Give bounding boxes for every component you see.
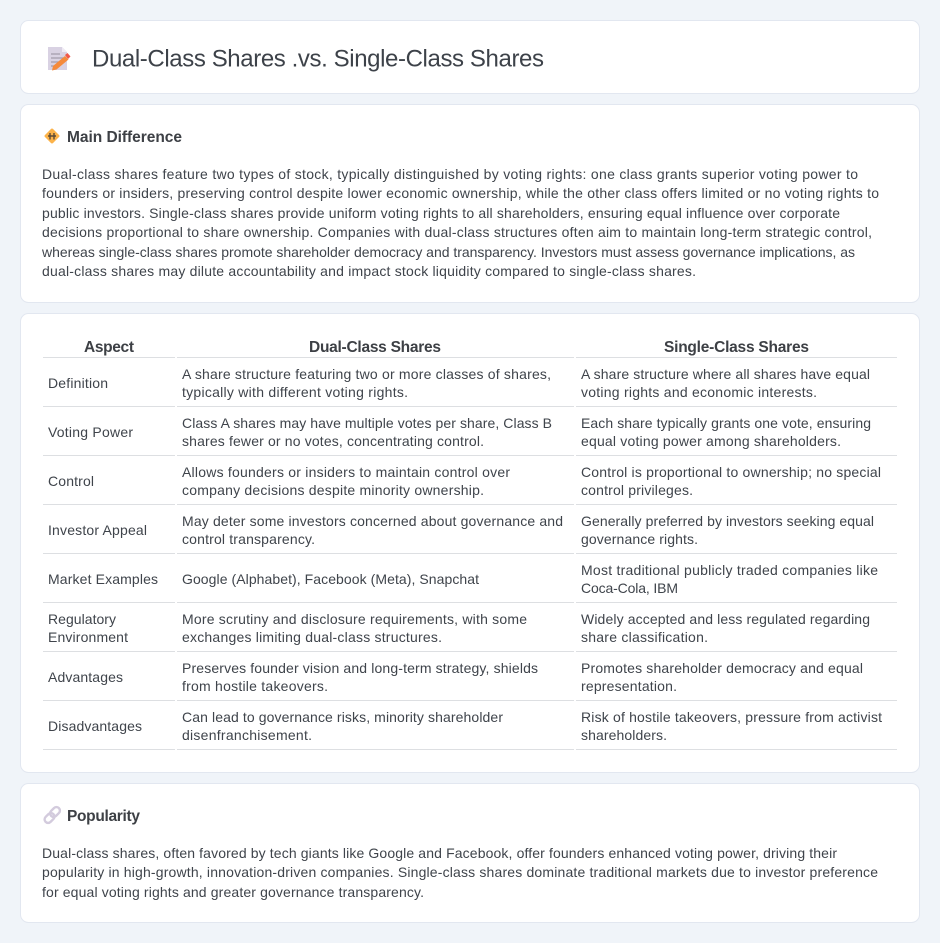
table row: voting power: Each share typically grants one vote, ensuring bbox=[581, 415, 871, 431]
text block: popularity paragraph: Dual-class shares, often favored by tech giants like Google and Facebook, offer founders enhanced voting power, driving their bbox=[42, 845, 837, 861]
table row: disadvantages: disenfranchisement. bbox=[182, 727, 312, 743]
table row: control: Control is proportional to ownership; no special bbox=[581, 464, 881, 480]
table row: voting power: Class A shares may have multiple votes per share, Class B bbox=[182, 415, 552, 431]
table header: Single-Class Shares bbox=[664, 339, 809, 356]
table row: market examples bbox=[48, 562, 878, 596]
table row: market examples: Coca-Cola, IBM bbox=[581, 580, 678, 596]
table row: disadvantages: Risk of hostile takeovers, pressure from activist bbox=[581, 709, 882, 725]
table row: advantages: from hostile takeovers. bbox=[182, 678, 328, 694]
table row: regulatory environment: Environment bbox=[48, 629, 128, 645]
table row: regulatory environment: Regulatory bbox=[48, 611, 116, 627]
table row: market examples: Google (Alphabet), Facebook (Meta), Snapchat bbox=[182, 571, 479, 587]
table row: voting power: shares fewer or no votes, concentrating control. bbox=[182, 433, 484, 449]
table row: definition bbox=[48, 366, 870, 400]
table row: control: Control bbox=[48, 473, 94, 489]
table row: investor appeal bbox=[48, 513, 874, 547]
table row: advantages bbox=[48, 660, 863, 694]
table row: investor appeal: governance rights. bbox=[581, 531, 698, 547]
table row: investor appeal: Generally preferred by investors seeking equal bbox=[581, 513, 874, 529]
table row: definition: A share structure featuring two or more classes of shares, bbox=[182, 366, 551, 382]
table row: voting power: Voting Power bbox=[48, 424, 133, 440]
table row: control bbox=[48, 464, 881, 498]
text block: main difference paragraph: whereas single-class shares promote shareholder democracy and transparency. Investors must assess governance implications, as bbox=[41, 244, 855, 260]
table row: regulatory environment: Widely accepted and less regulated regarding bbox=[581, 611, 870, 627]
table row: market examples: Market Examples bbox=[48, 571, 158, 587]
table row: investor appeal: Investor Appeal bbox=[48, 522, 147, 538]
table row: regulatory environment: share classification. bbox=[581, 629, 708, 645]
heading: main difference: Main Difference bbox=[67, 129, 182, 146]
title: Dual-Class Shares .vs. Single-Class Shares bbox=[92, 46, 544, 72]
text block: main difference paragraph: dual-class shares may dilute accountability and impact stock liquidity compared to single-class shares. bbox=[42, 263, 696, 279]
text block: popularity paragraph: popularity in high-growth, innovation-driven companies. Single-class shares dominate traditional markets due to investor preference bbox=[42, 864, 878, 880]
table header bbox=[84, 339, 809, 356]
table row: market examples: Most traditional publicly traded companies like bbox=[581, 562, 878, 578]
text block: main difference paragraph: founders or insiders, preserving control despite lower economic ownership, while the other class offers limited or no voting rights to bbox=[42, 185, 879, 201]
panel: comparison table bbox=[20, 314, 920, 772]
table row: disadvantages: Disadvantages bbox=[48, 718, 142, 734]
table row: control: company decisions despite minority ownership. bbox=[182, 482, 484, 498]
table row: definition: typically with different voting rights. bbox=[182, 384, 408, 400]
table row: disadvantages bbox=[48, 709, 882, 743]
table row: regulatory environment bbox=[48, 611, 870, 645]
table row: investor appeal: May deter some investors concerned about governance and bbox=[182, 513, 563, 529]
panel: main difference bbox=[20, 104, 920, 302]
table row: voting power bbox=[48, 415, 871, 449]
table row: definition: A share structure where all shares have equal bbox=[581, 366, 870, 382]
text block: main difference paragraph: decisions proportional to share ownership. Companies with dual-class structures often aim to maintain long-term strategic control, bbox=[42, 224, 872, 240]
table row: disadvantages: Can lead to governance risks, minority shareholder bbox=[182, 709, 503, 725]
table header: Dual-Class Shares bbox=[309, 339, 441, 356]
table row: advantages: Preserves founder vision and long-term strategy, shields bbox=[182, 660, 538, 676]
panel: title header bbox=[20, 20, 920, 94]
table header: Aspect bbox=[84, 339, 134, 356]
table row: definition: voting rights and economic interests. bbox=[581, 384, 817, 400]
text block: popularity paragraph bbox=[42, 845, 878, 900]
table row: disadvantages: shareholders. bbox=[581, 727, 667, 743]
text block: main difference paragraph bbox=[41, 166, 879, 279]
table row: control: Allows founders or insiders to maintain control over bbox=[182, 464, 510, 480]
icon: warning diamond bbox=[44, 128, 60, 144]
heading: popularity: Popularity bbox=[67, 808, 140, 825]
icon: chain link bbox=[43, 806, 61, 824]
table row: definition: Definition bbox=[48, 375, 108, 391]
table row: investor appeal: control transparency. bbox=[182, 531, 315, 547]
table row: regulatory environment: More scrutiny and disclosure requirements, with some bbox=[182, 611, 527, 627]
table row: advantages: Advantages bbox=[48, 669, 123, 685]
table row: voting power: equal voting power among shareholders. bbox=[581, 433, 841, 449]
table row: advantages: representation. bbox=[581, 678, 677, 694]
icon: document with pencil bbox=[48, 47, 70, 70]
text block: main difference paragraph: Dual-class shares feature two types of stock, typically distinguished by voting rights: one class grants superior voting power to bbox=[42, 166, 858, 182]
table row: control: control privileges. bbox=[581, 482, 693, 498]
text block: popularity paragraph: for equal voting rights and greater governance transparency. bbox=[42, 884, 424, 900]
text block: main difference paragraph: public investors. Single-class shares provide uniform voting rights to all shareholders, ensuring equal influence over corporate bbox=[42, 205, 840, 221]
panel: popularity bbox=[20, 784, 920, 922]
table row: regulatory environment: exchanges limiting dual-class structures. bbox=[182, 629, 442, 645]
table row: advantages: Promotes shareholder democracy and equal bbox=[581, 660, 863, 676]
